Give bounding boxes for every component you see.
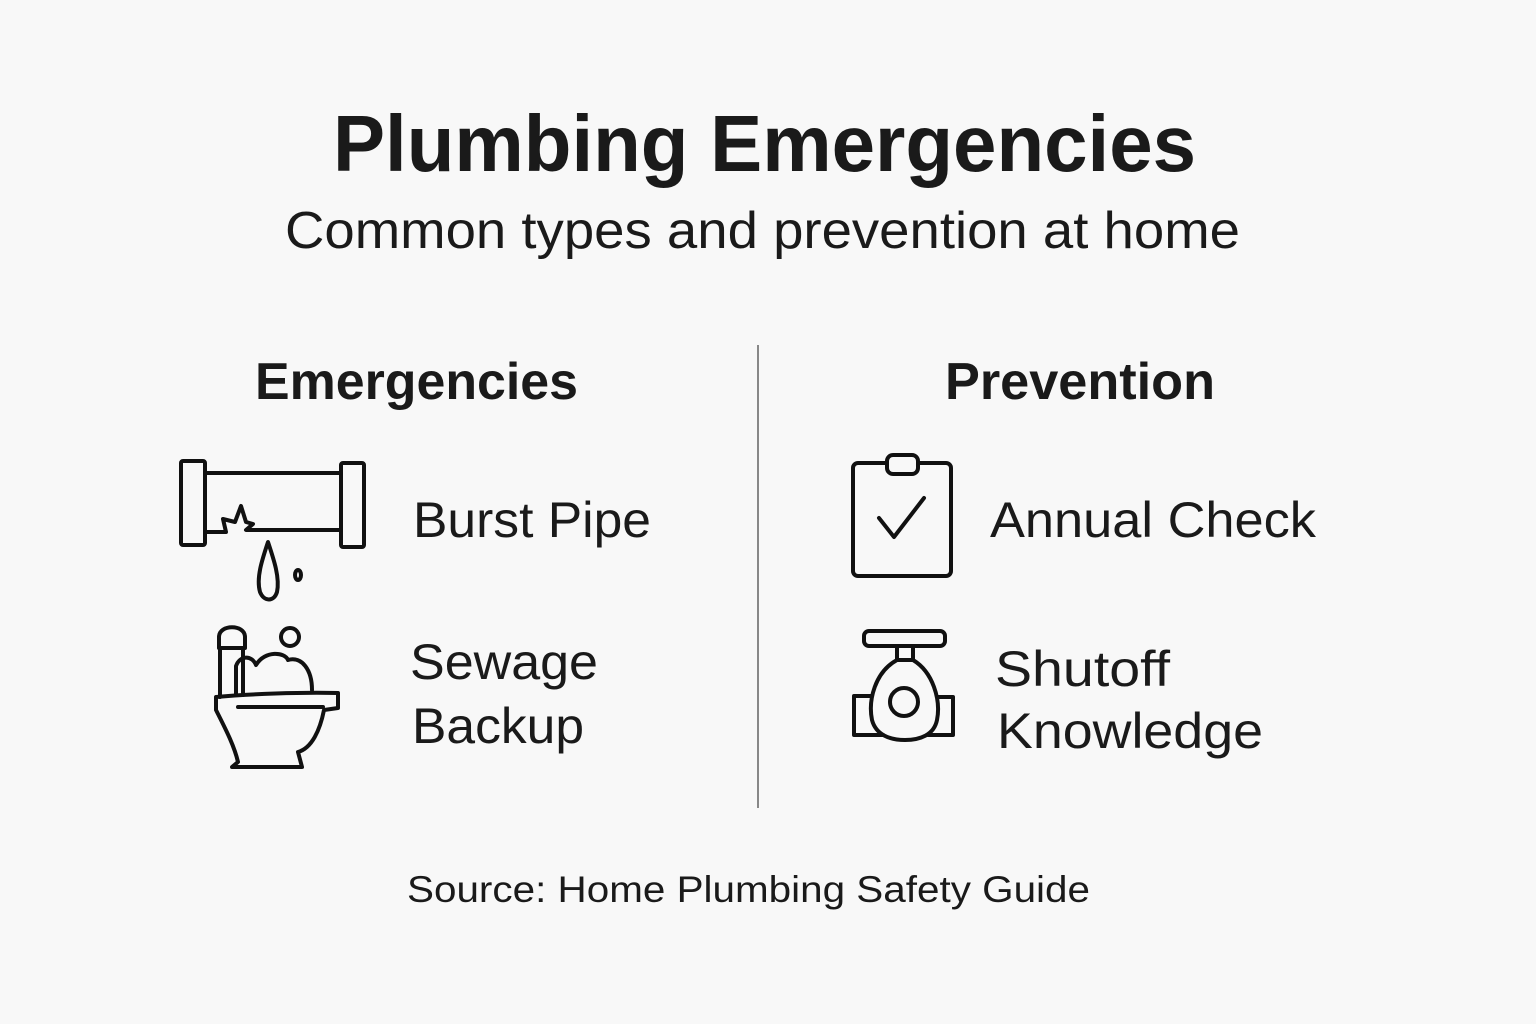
- title: Plumbing Emergencies: [333, 99, 1196, 188]
- label: sewage backup: Sewage: [410, 634, 598, 690]
- icon: clipboard check: [853, 455, 951, 576]
- icon: toilet: [216, 627, 338, 767]
- label: shutoff knowledge: Shutoff: [995, 641, 1170, 697]
- subtitle: Common types and prevention at home: [285, 202, 1240, 260]
- text: Knowledge: [997, 703, 1263, 759]
- heading: emergencies: Emergencies: [255, 353, 578, 411]
- label: annual check: Annual Check: [990, 492, 1317, 548]
- source: Source: Home Plumbing Safety Guide: [407, 869, 1090, 910]
- icon: burst pipe: [181, 461, 364, 600]
- icon: shutoff valve: [854, 631, 953, 740]
- heading: prevention: Prevention: [945, 353, 1215, 411]
- text: Backup: [412, 698, 584, 754]
- label: burst pipe: Burst Pipe: [413, 492, 651, 548]
